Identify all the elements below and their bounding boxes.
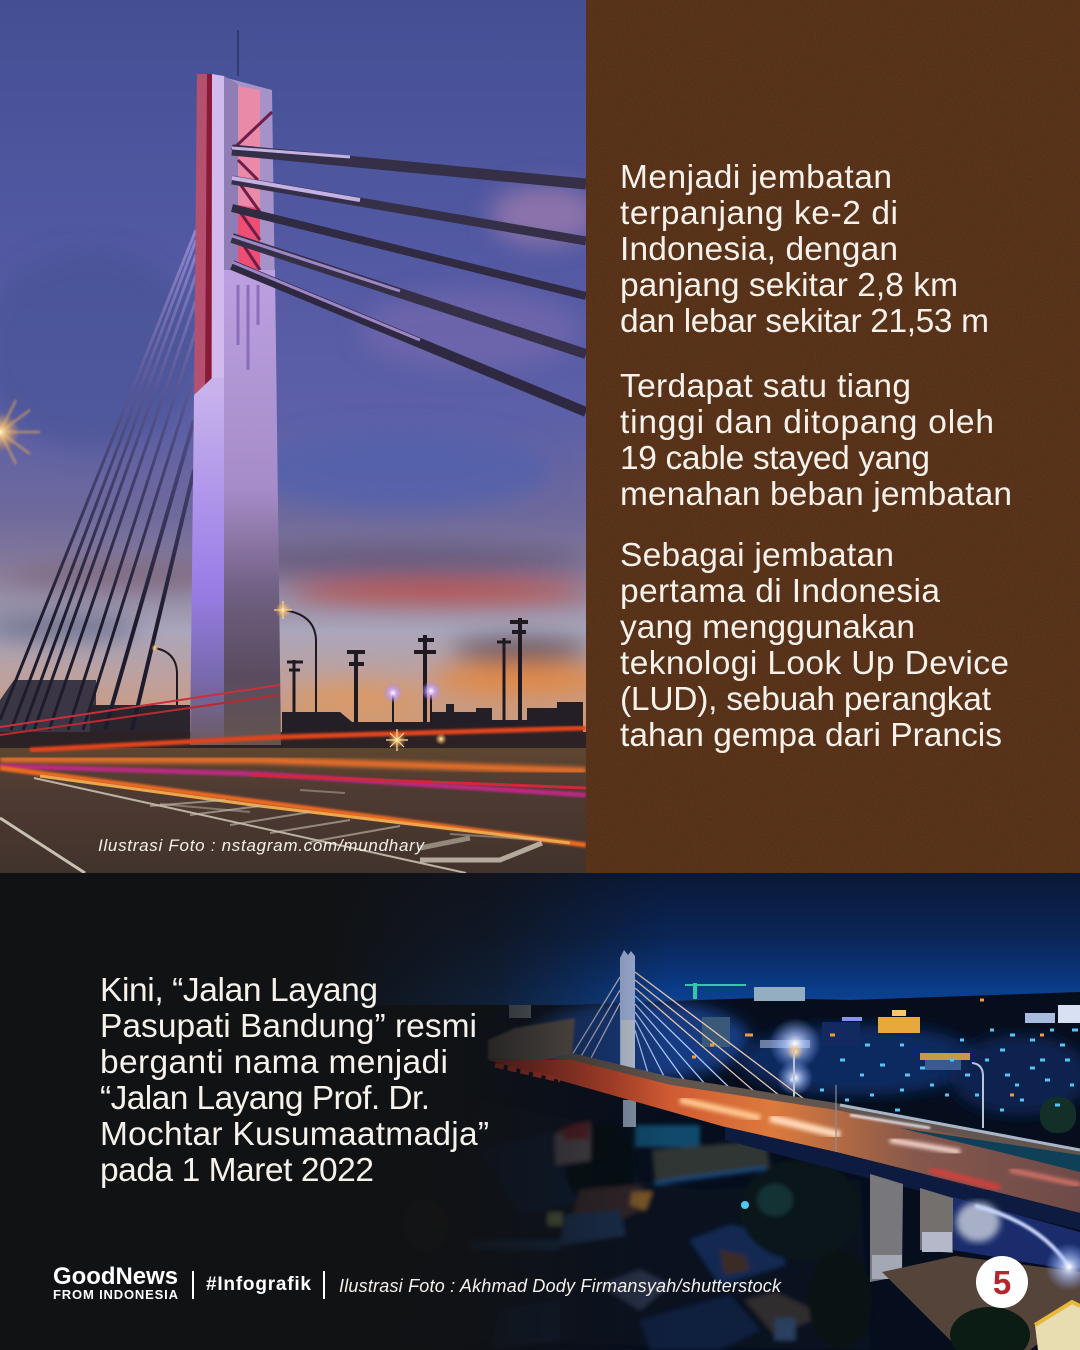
left dark gradient overlay bbox=[0, 873, 1080, 1350]
bridge pylon and cables bbox=[572, 950, 832, 1127]
bridge columns bbox=[870, 1174, 953, 1282]
ground lit area and floodlight bbox=[882, 1256, 1080, 1350]
pylon bbox=[190, 30, 281, 745]
footer: hashtag: #Infografik bbox=[206, 1274, 311, 1295]
footer: logo bbox=[53, 1263, 179, 1302]
footer: photo credit: Ilustrasi Foto : Akhmad Dody Firmansyah/shutterstock bbox=[339, 1276, 782, 1296]
dark city mass bbox=[480, 992, 1080, 1350]
text block: renaming statement: berganti nama menjadi bbox=[100, 1044, 448, 1081]
road bbox=[0, 748, 586, 873]
page number badge: 5 bbox=[993, 1264, 1011, 1301]
bridge far approach bbox=[488, 1018, 575, 1062]
text block: Look Up Device: yang menggunakan bbox=[620, 609, 915, 646]
mural wall and floodlight bbox=[953, 1197, 1080, 1268]
right cables bbox=[232, 148, 586, 412]
footer: logo: GoodNews bbox=[53, 1263, 178, 1290]
text block: renaming statement bbox=[100, 972, 489, 1189]
bridge deck bbox=[488, 1053, 1080, 1230]
text block: length and width: Indonesia, dengan bbox=[620, 231, 898, 268]
distant buildings bbox=[509, 983, 1080, 1133]
text block: length and width: terpanjang ke-2 di bbox=[620, 195, 898, 232]
text block: renaming statement: “Jalan Layang Prof. Dr. bbox=[100, 1080, 430, 1117]
text block: Look Up Device: (LUD), sebuah perangkat bbox=[620, 681, 992, 718]
left cables bbox=[0, 230, 196, 730]
text block: length and width bbox=[620, 159, 989, 340]
footer: divider two bbox=[323, 1271, 325, 1299]
sunset clouds bbox=[0, 185, 610, 718]
text block: Look Up Device: teknologi Look Up Device bbox=[620, 645, 1009, 682]
page number badge bbox=[976, 1256, 1028, 1308]
text block: Look Up Device bbox=[620, 537, 1009, 754]
text block: length and width: panjang sekitar 2,8 km bbox=[620, 267, 958, 304]
text block: renaming statement: pada 1 Maret 2022 bbox=[100, 1152, 374, 1189]
panel: night bridge photo bbox=[0, 873, 1080, 1350]
lower city blobs bbox=[400, 1100, 872, 1350]
text block: Look Up Device: tahan gempa dari Prancis bbox=[620, 717, 1002, 754]
street lamps and poles bbox=[155, 610, 528, 745]
text block: pylon and cables: 19 cable stayed yang bbox=[620, 440, 930, 477]
tree and yellow-roof house bbox=[950, 1302, 1080, 1350]
light trails bbox=[0, 685, 586, 845]
lights bbox=[0, 400, 40, 464]
text block: Look Up Device: Sebagai jembatan bbox=[620, 537, 894, 574]
text block: pylon and cables: tinggi dan ditopang oleh bbox=[620, 404, 994, 441]
text block: renaming statement: Kini, “Jalan Layang bbox=[100, 972, 378, 1009]
text block: length and width: dan lebar sekitar 21,53 m bbox=[620, 303, 989, 340]
text block: length and width: Menjadi jembatan bbox=[620, 159, 892, 196]
road markings bbox=[0, 778, 542, 873]
skyline bbox=[282, 702, 583, 745]
footer: divider one bbox=[192, 1271, 194, 1299]
photo credit caption: Ilustrasi Foto : nstagram.com/mundhary bbox=[98, 836, 426, 855]
left background building bbox=[0, 680, 190, 748]
text block: pylon and cables: menahan beban jembatan bbox=[620, 476, 1012, 513]
text block: pylon and cables: Terdapat satu tiang bbox=[620, 368, 911, 405]
footer: logo: FROM INDONESIA bbox=[53, 1287, 179, 1302]
panel: brown text background bbox=[586, 0, 1080, 874]
text block: pylon and cables bbox=[620, 368, 1012, 513]
text block: renaming statement: Pasupati Bandung” resmi bbox=[100, 1008, 477, 1045]
blue city haze bbox=[530, 1000, 750, 1080]
street lamp glows bbox=[769, 1018, 821, 1070]
panel: bridge pylon photo bbox=[0, 0, 610, 873]
text block: Look Up Device: pertama di Indonesia bbox=[620, 573, 940, 610]
scattered blue and warm lights bbox=[790, 1030, 1078, 1110]
text block: renaming statement: Mochtar Kusumaatmadja” bbox=[100, 1116, 489, 1153]
